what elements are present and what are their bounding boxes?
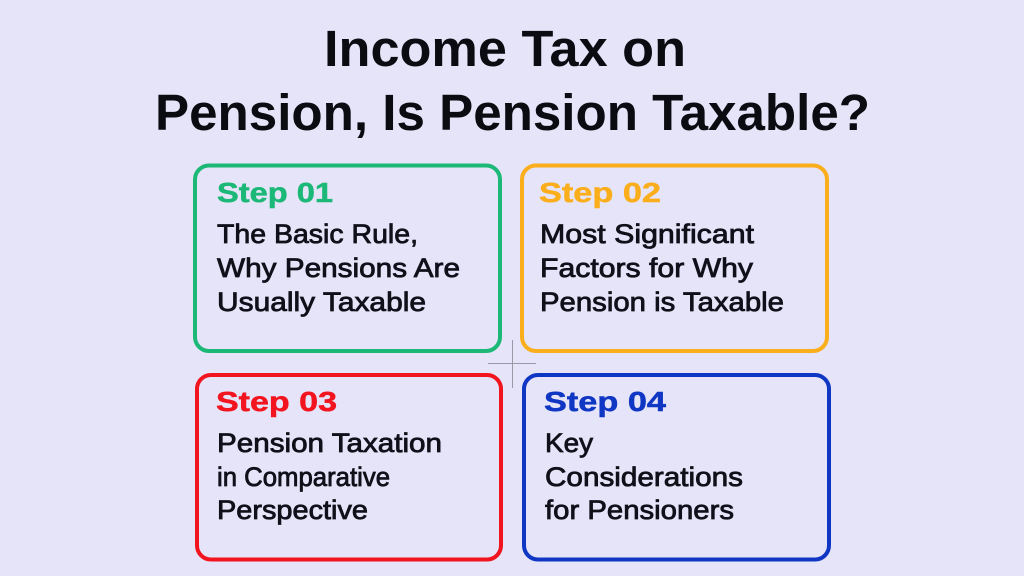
step 04 text: Key [545, 428, 594, 458]
step 03 label: Step 03 [216, 386, 337, 417]
title [155, 20, 870, 141]
step 04 text: for Pensioners [545, 495, 734, 525]
crosshair mark [488, 340, 536, 388]
step 04 label: Step 04 [544, 386, 667, 417]
step 02 text: Pension is Taxable [540, 287, 784, 317]
step 01 label: Step 01 [217, 177, 333, 208]
step 03 text: Pension Taxation [217, 428, 442, 458]
panel: step 04 [524, 375, 829, 560]
title: Income Tax on [324, 20, 686, 77]
step 04 text: Considerations [545, 462, 743, 492]
step 02 text: Factors for Why [540, 253, 754, 283]
step 01 text: Usually Taxable [217, 287, 426, 317]
step 02 text: Most Significant [540, 219, 755, 249]
panel: step 02 [522, 166, 827, 351]
panel: step 01 [195, 166, 500, 351]
title: Pension, Is Pension Taxable? [155, 84, 870, 141]
step 02 label: Step 02 [539, 177, 661, 208]
step 04 text [545, 428, 743, 525]
step 01 text: Why Pensions Are [217, 253, 460, 283]
step 02 text [540, 219, 784, 317]
step 03 text: in Comparative [217, 462, 390, 492]
step 03 text: Perspective [217, 495, 368, 525]
step 01 text [217, 219, 460, 317]
step 01 text: The Basic Rule, [217, 219, 418, 249]
step 03 text [217, 428, 442, 525]
panel: step 03 [197, 375, 501, 560]
